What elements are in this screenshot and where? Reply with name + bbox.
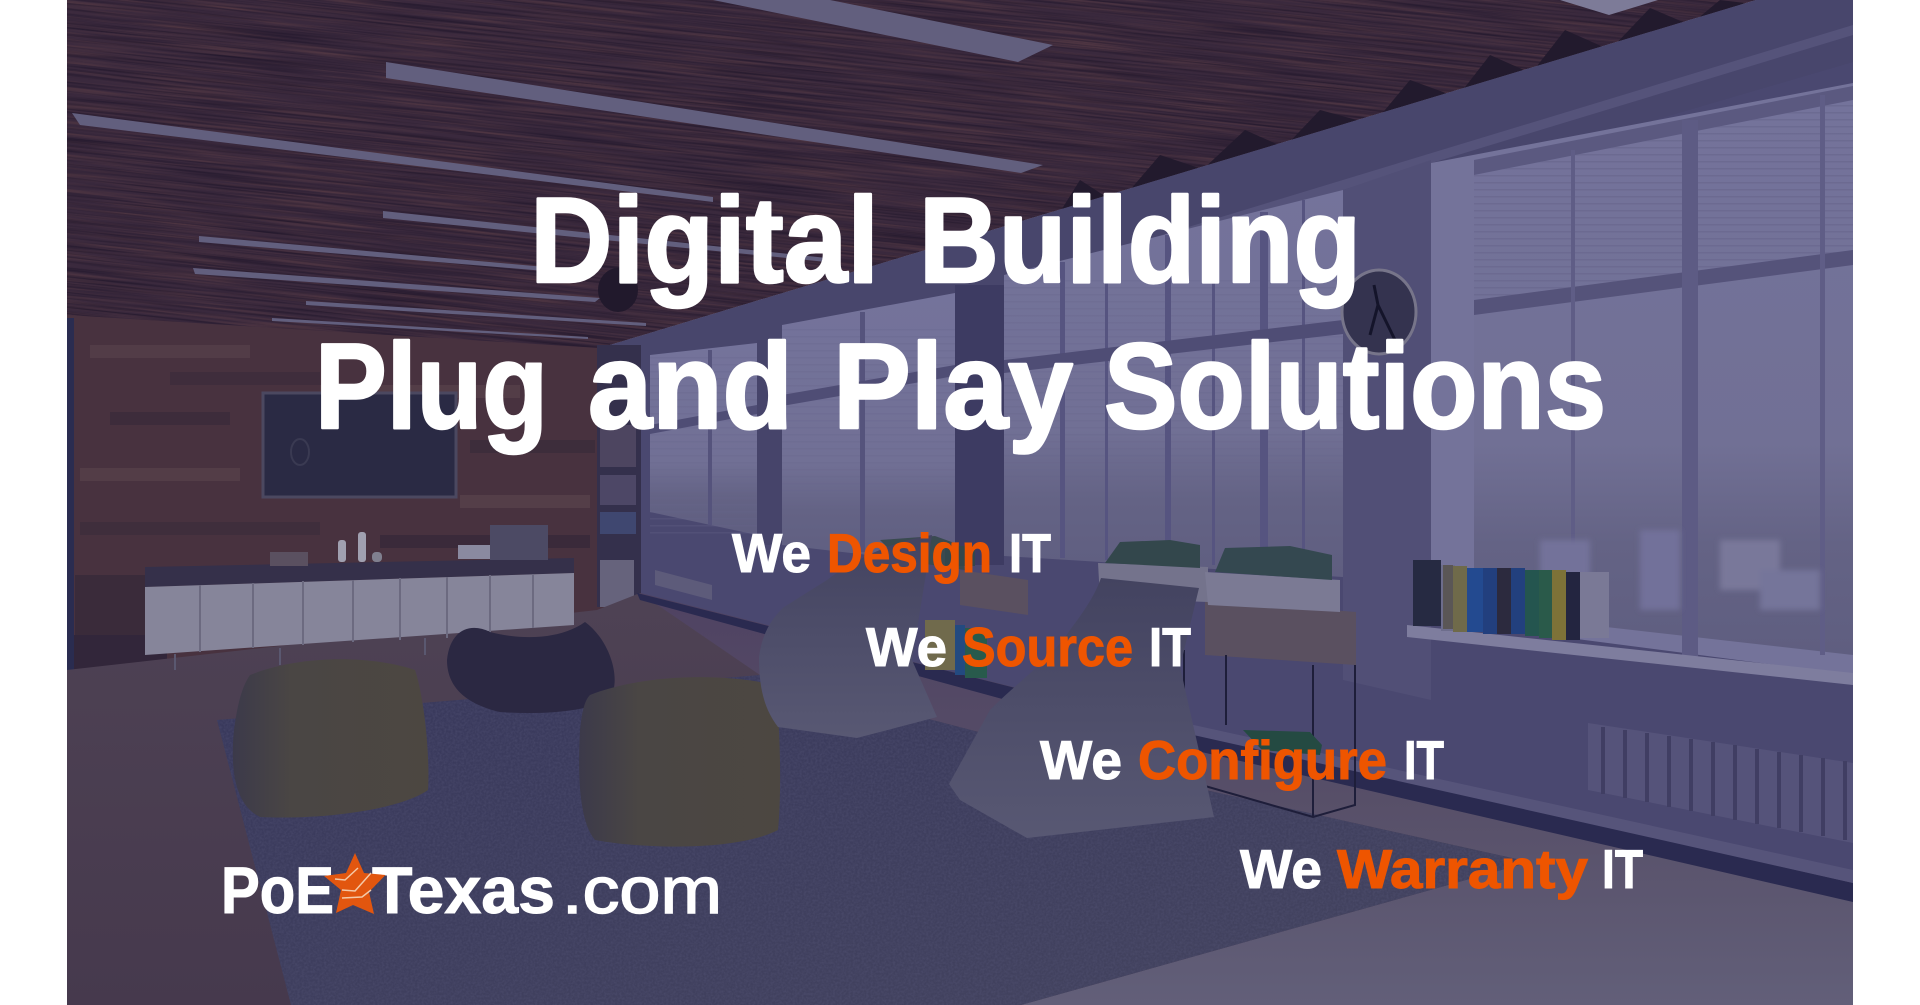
tagline: We Source IT: IT — [1149, 616, 1191, 678]
title line 2 — [315, 318, 1606, 454]
baseboard — [637, 593, 1853, 902]
title line 2: Plug — [315, 318, 548, 454]
ceiling lights — [72, 0, 1658, 339]
TV on wall — [263, 393, 456, 497]
books in stand — [925, 620, 1322, 755]
title line 1: Digital — [530, 172, 879, 308]
title line 1: Building — [919, 172, 1361, 308]
title line 2: and — [588, 318, 793, 454]
tagline: We Source IT — [866, 616, 1191, 678]
tagline: We Configure IT: IT — [1404, 729, 1444, 791]
window sill — [1407, 625, 1853, 685]
chair: left — [759, 535, 937, 738]
big right window — [1431, 83, 1853, 675]
wood panel wall — [67, 300, 607, 680]
pouf: left olive — [233, 659, 428, 818]
tagline: We Configure IT — [1040, 729, 1444, 791]
tagline: We Warranty IT: We — [1240, 838, 1322, 900]
tagline: We Design IT: IT — [1009, 522, 1051, 584]
title line 1 — [530, 172, 1361, 308]
ceiling — [67, 0, 1756, 348]
radiator under left window — [655, 570, 712, 600]
pouf: dark round — [447, 622, 615, 713]
pouf: centre olive — [579, 677, 780, 847]
chair: right — [949, 578, 1214, 838]
tagline: We Design IT: Design — [827, 522, 992, 584]
icon: orange star with circuit traces — [324, 853, 386, 914]
tagline: We Warranty IT: IT — [1602, 838, 1643, 900]
rug — [217, 675, 1537, 1005]
plant stand and planters — [880, 536, 1356, 817]
tagline: We Source IT: Source — [962, 616, 1133, 678]
logo: PoE Texas.com: Texas — [372, 853, 555, 927]
tagline: We Design IT: We — [732, 522, 811, 584]
logo: PoE Texas.com: .com — [562, 853, 722, 927]
tagline: We Source IT: We — [866, 616, 947, 678]
logo: PoE Texas.com: PoE — [221, 853, 334, 927]
ceiling edge beam — [600, 0, 1853, 390]
binders on sill — [1413, 560, 1609, 640]
title line 2: Solutions — [1104, 318, 1606, 454]
radiator — [1588, 723, 1853, 843]
bookshelf — [597, 345, 641, 607]
tagline: We Warranty IT — [1240, 838, 1643, 900]
far windows — [650, 190, 1343, 577]
title line 2: Play — [833, 318, 1073, 454]
tagline: We Configure IT: Configure — [1138, 729, 1387, 791]
pillar with clock — [1342, 160, 1431, 700]
tagline: We Design IT — [732, 522, 1051, 584]
window wall — [600, 0, 1853, 900]
logo: PoE Texas.com — [221, 853, 722, 927]
cabinet — [145, 525, 574, 670]
tagline: We Configure IT: We — [1040, 729, 1122, 791]
floor — [67, 593, 1853, 1005]
title — [315, 172, 1606, 454]
tagline: We Warranty IT: Warranty — [1337, 838, 1588, 900]
